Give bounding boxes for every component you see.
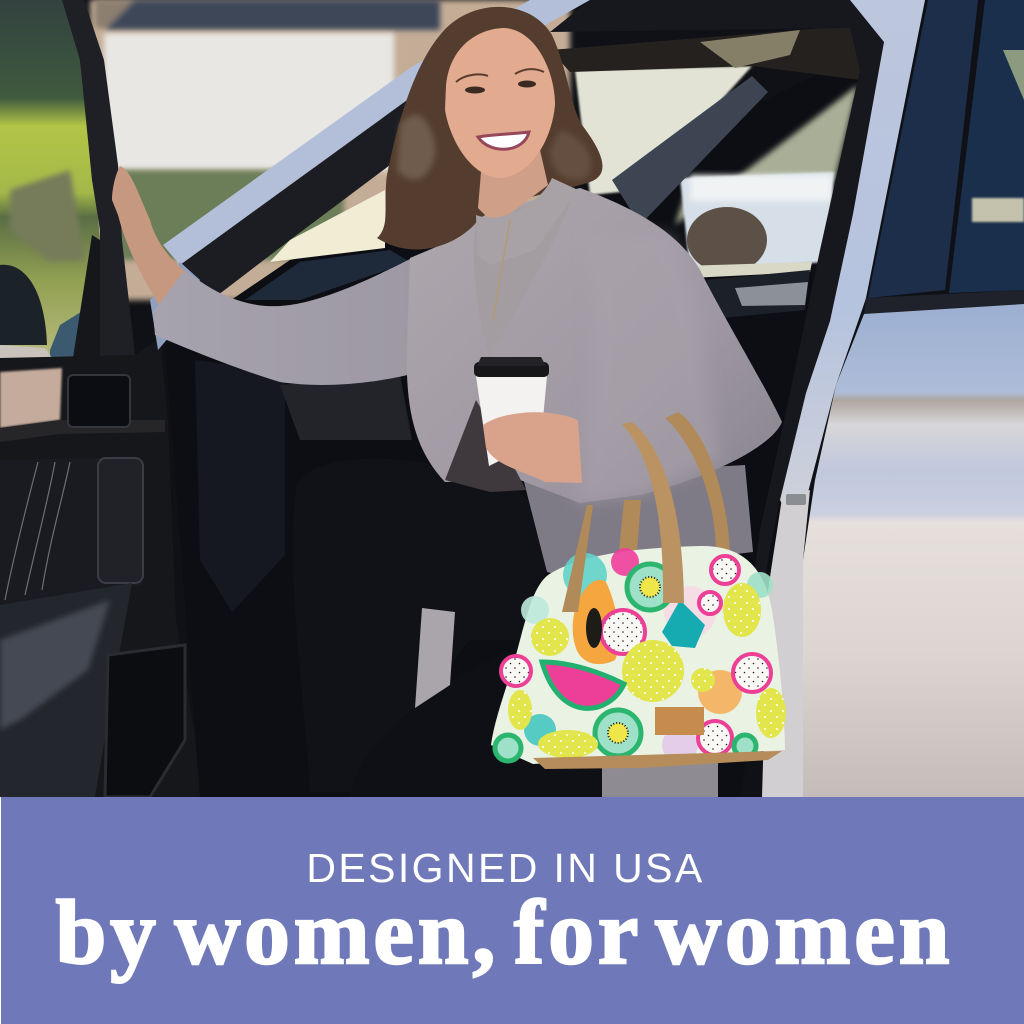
bag label <box>655 707 704 735</box>
background: house and lawn <box>0 0 1024 797</box>
heading: designed in USA: DESIGNED IN USA <box>306 845 705 891</box>
door latch <box>786 494 806 505</box>
woman: necklace <box>493 220 510 320</box>
bag fruit: watermelon <box>542 662 624 708</box>
bag leather base <box>533 751 782 769</box>
woman: left sleeve <box>153 258 420 385</box>
bag pastel patches <box>521 548 773 763</box>
coffee cup <box>474 357 549 466</box>
bag fruit: leaf <box>662 600 705 648</box>
woman: eyebrows <box>456 69 544 82</box>
fruit print bag <box>491 546 786 769</box>
car interior <box>165 25 868 797</box>
woman: raised hand <box>112 166 186 315</box>
car body: rear door panel <box>803 304 1024 797</box>
banner <box>1 797 1024 1024</box>
bag fruit: kiwis <box>495 564 756 761</box>
woman: cardigan <box>407 188 782 503</box>
woman: neck <box>478 150 548 225</box>
bag handles behind <box>619 412 730 552</box>
car roof edge and door seal <box>150 0 884 620</box>
heading: by women, for women: by women, for women <box>56 882 953 983</box>
woman: trousers <box>293 459 718 797</box>
left door panel <box>0 338 205 797</box>
woman: eyes <box>465 80 536 94</box>
car body: pillar and windows <box>780 0 1024 520</box>
bag fruit: papaya seeds <box>586 608 602 648</box>
woman: smile <box>478 132 529 149</box>
triangle window post <box>73 235 100 358</box>
bag left handle <box>562 505 593 612</box>
photo: woman stepping out of a car with a fruit-print bag <box>0 0 1024 797</box>
hand holding cup <box>483 412 582 483</box>
woman: cardigan lower body <box>523 465 753 575</box>
door pillar <box>62 0 135 358</box>
bag front handle <box>622 422 684 603</box>
bag fruit: limes <box>508 583 786 758</box>
woman: turtleneck collar <box>476 178 578 265</box>
woman: face <box>445 28 555 178</box>
woman: hair <box>377 7 602 249</box>
bag fruit: kiwi centres <box>608 577 660 743</box>
bag fruit: dragon fruit slices <box>501 556 771 755</box>
left door window <box>0 0 100 362</box>
bag fruit: papaya <box>573 580 619 664</box>
door strip <box>762 490 810 797</box>
